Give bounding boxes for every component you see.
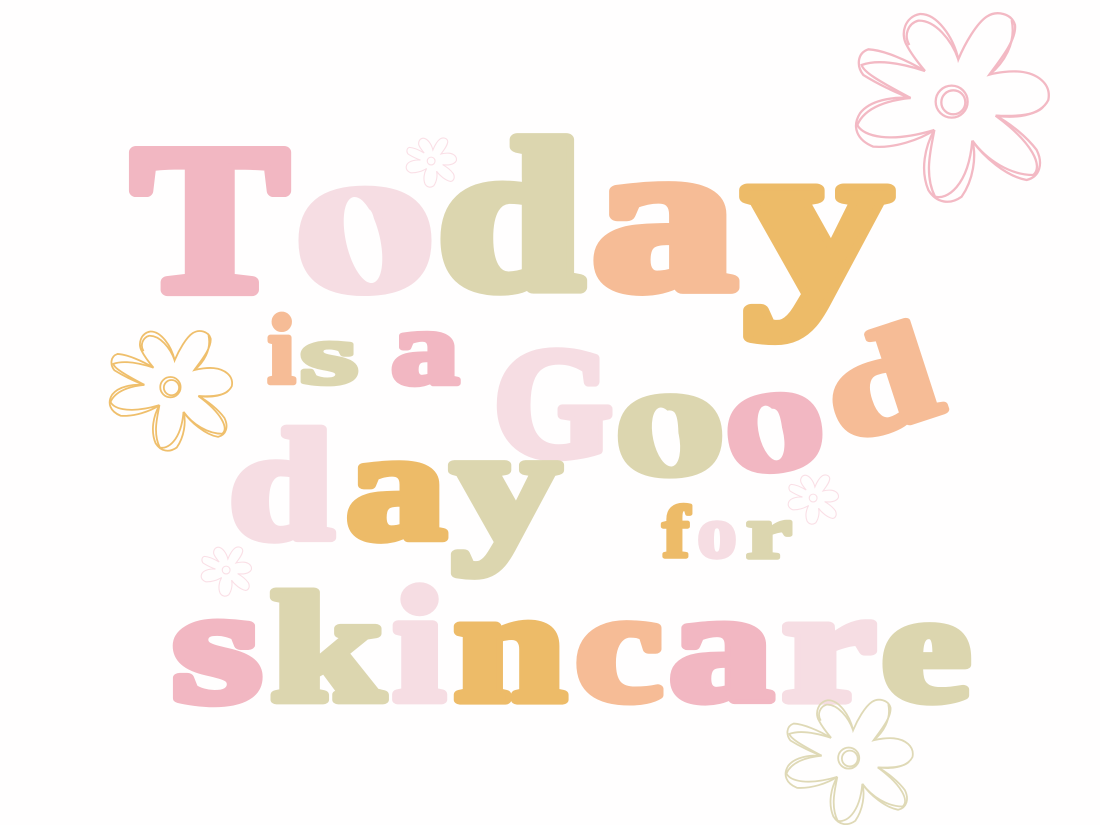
word: skincare: n <box>454 558 566 735</box>
word: Today: a <box>593 99 735 334</box>
word: is a: i <box>268 296 295 403</box>
word: Good: d <box>804 292 955 472</box>
word: Today: T <box>132 102 288 335</box>
word: Today: d <box>438 98 582 334</box>
word: day <box>229 395 560 576</box>
word: Good: o <box>716 329 831 505</box>
word: for: o <box>698 493 736 573</box>
word: day: d <box>229 399 333 572</box>
word: Good: o <box>616 331 724 507</box>
word: is a <box>268 290 459 407</box>
word: Good <box>494 292 955 507</box>
word: for: r <box>746 492 792 574</box>
word: for: f <box>663 492 691 573</box>
word: skincare: a <box>670 558 772 734</box>
word: for <box>663 492 792 574</box>
word: is a: a <box>391 290 459 407</box>
icon: small flower left <box>201 547 251 596</box>
word: skincare <box>173 555 970 736</box>
word: skincare: e <box>882 562 970 733</box>
word: skincare: r <box>783 558 875 735</box>
word: skincare: k <box>271 562 383 733</box>
icon: yellow flower <box>110 331 232 451</box>
icon: khaki flower <box>786 700 913 824</box>
icon: small flower right <box>788 475 838 524</box>
word: Today: y <box>745 95 890 339</box>
word: day: a <box>346 401 446 572</box>
icon: small flower top <box>406 138 456 187</box>
word: Today <box>132 95 890 339</box>
word: skincare: s <box>173 555 261 736</box>
word: Good: G <box>494 318 612 490</box>
word: skincare: c <box>576 558 662 734</box>
word: skincare: i <box>394 556 444 735</box>
word: Today: o <box>296 107 434 333</box>
word: day: y <box>452 395 560 576</box>
word: is a: s <box>300 307 358 401</box>
icon: large pink flower <box>856 13 1049 202</box>
